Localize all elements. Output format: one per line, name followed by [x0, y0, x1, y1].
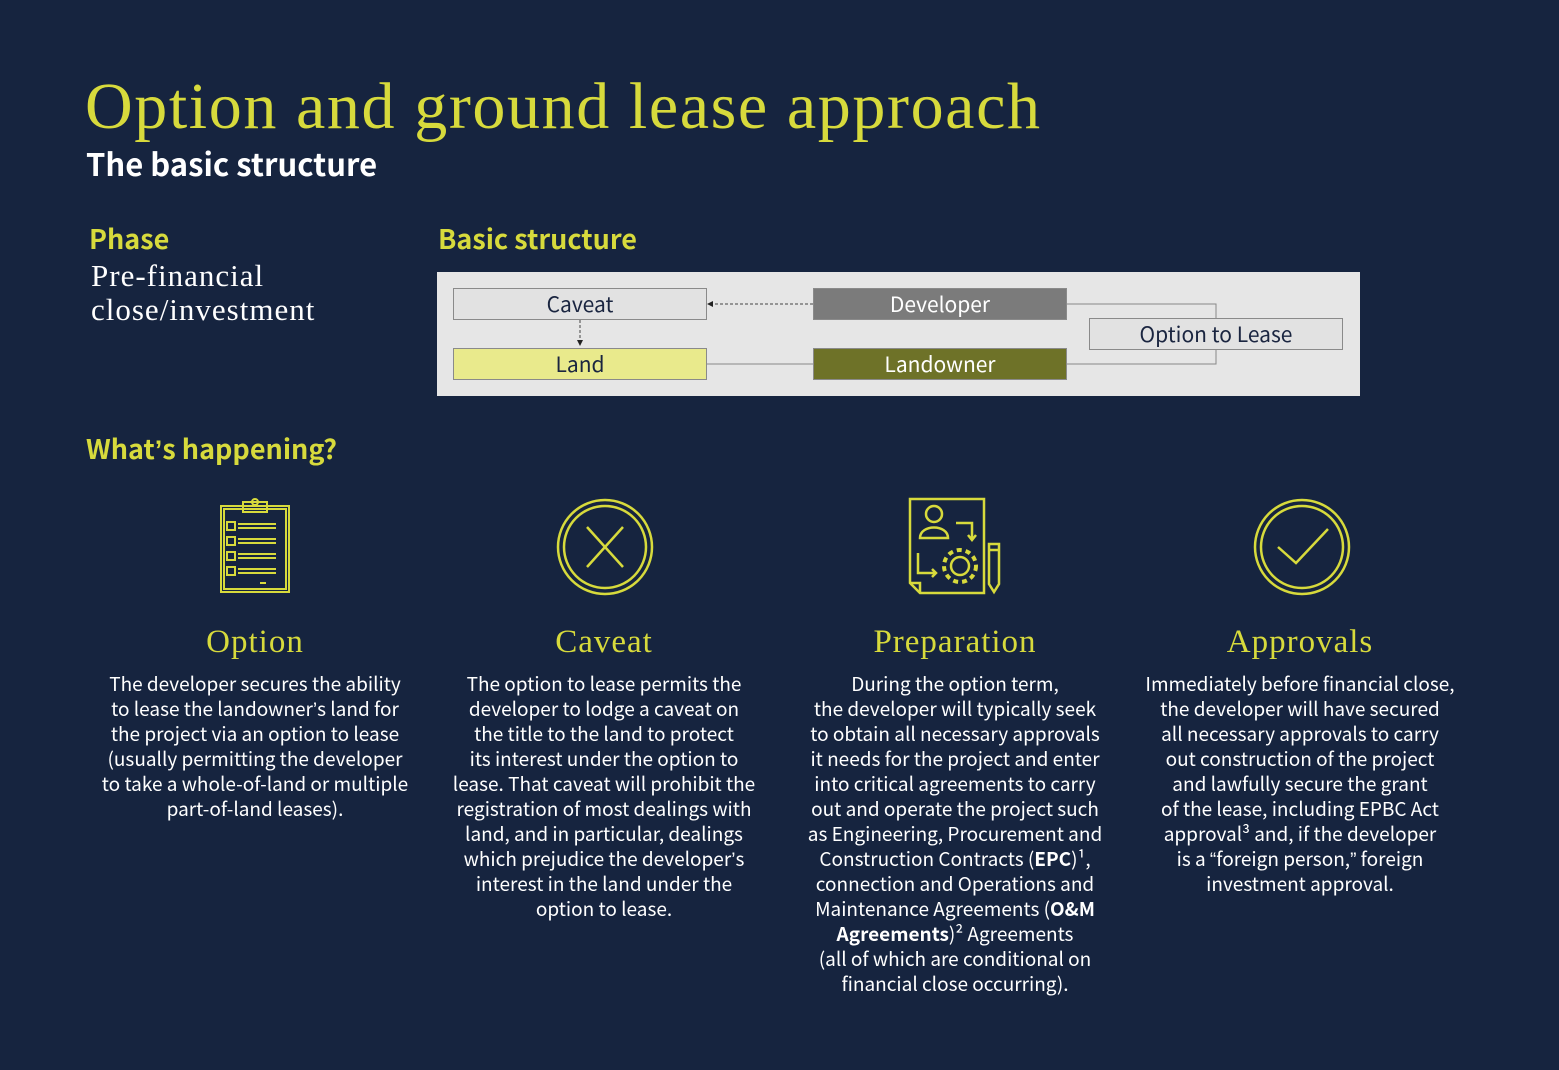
column: option: to lease the landowner’s land for — [111, 695, 399, 722]
column: caveat: developer to lodge a caveat on — [469, 695, 739, 722]
column: approvals: Approvals — [1227, 624, 1373, 660]
box: land: Land — [555, 349, 605, 379]
icon: cross circle — [556, 498, 654, 596]
box: caveat — [453, 288, 707, 320]
box: caveat: Caveat — [547, 289, 613, 319]
column: option: to take a whole-of-land or multiple — [102, 770, 408, 797]
column: caveat: which prejudice the developer’s — [464, 845, 744, 872]
what's happening heading: What’s happening? — [86, 428, 337, 467]
column: approvals: and lawfully secure the grant — [1172, 770, 1428, 797]
box: landowner — [813, 348, 1067, 380]
subtitle: The basic structure — [86, 140, 377, 185]
phase text: Pre-financial — [91, 258, 264, 293]
column: approvals: investment approval. — [1206, 870, 1394, 897]
box: developer: Developer — [890, 289, 990, 319]
phase text: close/investment — [91, 292, 315, 327]
column: caveat: the title to the land to protect — [474, 720, 734, 747]
column: preparation: Preparation — [873, 624, 1037, 660]
icon: clipboard — [220, 498, 290, 593]
column: preparation: it needs for the project and enter — [810, 745, 1100, 772]
phase text — [91, 258, 315, 327]
column: option: part-of-land leases). — [167, 795, 343, 822]
column: preparation: Maintenance Agreements (O&M — [815, 895, 1095, 922]
icon: check circle — [1254, 498, 1350, 596]
column: caveat: The option to lease permits the — [467, 670, 741, 697]
column: caveat: Caveat — [555, 624, 653, 660]
box: option to lease — [1089, 318, 1343, 350]
column: approvals: out construction of the project — [1166, 745, 1434, 772]
icon: preparation document — [908, 498, 1000, 594]
box: landowner: Landowner — [884, 349, 996, 379]
column: preparation: During the option term, — [851, 670, 1059, 697]
column: caveat: land, and in particular, dealings — [465, 820, 743, 847]
column: preparation: Agreements)² Agreements — [837, 920, 1073, 947]
column: approvals: approval³ and, if the developer — [1164, 820, 1436, 847]
column: preparation: out and operate the project such — [811, 795, 1099, 822]
column: approvals: of the lease, including EPBC Act — [1161, 795, 1439, 822]
column: approvals: is a “foreign person,” foreign — [1177, 845, 1423, 872]
column: preparation: connection and Operations and — [816, 870, 1094, 897]
column: option: the project via an option to lease — [111, 720, 399, 747]
column: caveat — [453, 624, 755, 922]
column: approvals — [1145, 624, 1455, 897]
column: preparation: financial close occurring). — [841, 970, 1069, 997]
column: option: The developer secures the ability — [109, 670, 401, 697]
column: option: (usually permitting the developer — [107, 745, 403, 772]
column: caveat: interest in the land under the — [476, 870, 732, 897]
column: caveat: option to lease. — [536, 895, 672, 922]
basic structure heading: Basic structure — [438, 218, 637, 257]
box: land — [453, 348, 707, 380]
column: preparation: the developer will typically seek — [814, 695, 1096, 722]
column: caveat: registration of most dealings with — [457, 795, 751, 822]
column: approvals: the developer will have secured — [1160, 695, 1440, 722]
title: Option and ground lease approach — [85, 70, 1042, 143]
phase heading: Phase — [89, 218, 169, 257]
column: approvals: Immediately before financial close, — [1145, 670, 1455, 697]
column: caveat: its interest under the option to — [470, 745, 738, 772]
column: preparation — [808, 624, 1102, 997]
column: preparation: as Engineering, Procurement and — [808, 820, 1102, 847]
column: option — [102, 624, 408, 822]
diagram — [437, 272, 1360, 396]
column: preparation: (all of which are conditional on — [819, 945, 1091, 972]
box: option to lease: Option to Lease — [1140, 319, 1292, 349]
column: approvals: all necessary approvals to carry — [1161, 720, 1439, 747]
column: preparation: Construction Contracts (EPC)¹, — [819, 845, 1091, 872]
column: preparation: to obtain all necessary approvals — [810, 720, 1100, 747]
box: developer — [813, 288, 1067, 320]
column: caveat: lease. That caveat will prohibit the — [453, 770, 755, 797]
column: preparation: into critical agreements to carry — [814, 770, 1096, 797]
column: option: Option — [206, 624, 304, 660]
